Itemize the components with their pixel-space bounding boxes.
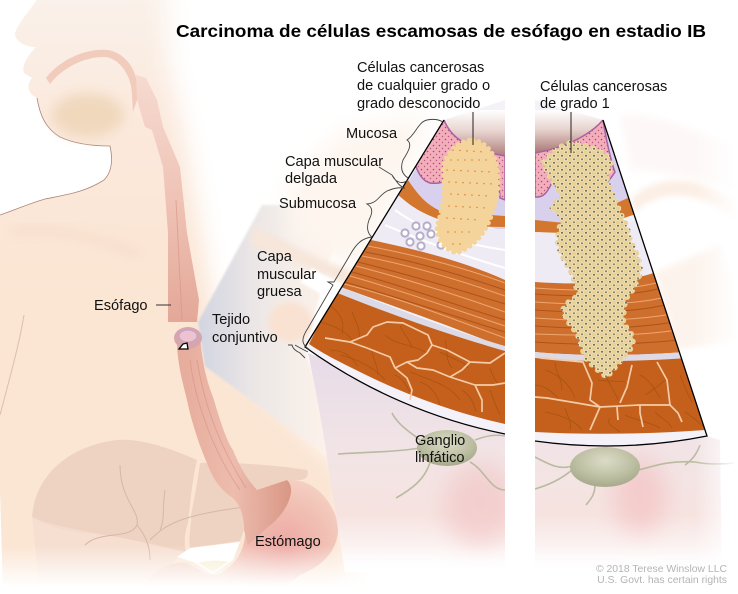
lumen [445,110,505,156]
label: ganglio linfático: Ganglio [415,433,465,449]
fade to right [695,90,738,570]
copyright: U.S. Govt. has certain rights [597,575,727,586]
pale tissue behind left sector [250,115,430,342]
connective tissue background left [308,353,505,572]
thin muscle [398,180,505,227]
label: estómago: Estómago [255,534,321,550]
lymph node left [338,413,505,498]
gap under liver [177,542,240,574]
layer brackets [288,119,443,358]
tumor [437,140,498,253]
lobe cracks [535,358,682,430]
thin muscle left [535,220,561,233]
label: capa muscular gruesa: muscular [257,267,316,283]
liver right lobe [189,463,308,548]
label: capa muscular delgada: delgada [285,171,338,187]
node body [570,447,640,487]
glands [401,222,445,250]
submucosa streaks [385,210,505,268]
body silhouette [0,0,350,579]
copyright: © 2018 Terese Winslow LLC [596,564,727,575]
muscle highlights [344,246,505,338]
label: capa muscular delgada: Capa muscular [285,154,383,170]
label: submucosa: Submucosa [279,196,357,212]
thick muscle ghost [655,245,738,350]
separating band [335,285,505,351]
thin muscle ghost [630,180,738,220]
submucosa [536,232,542,233]
lobed outer muscle [309,292,505,424]
label: tumor grade 1: de grado 1 [540,96,610,112]
cut ring [174,327,202,349]
sector base [535,100,715,445]
sector 1 [300,100,505,440]
fat under liver [198,561,228,572]
upper pale tissue [285,115,430,270]
separating band [535,352,688,361]
neck and shoulder outline [0,98,112,215]
stomach [140,480,338,594]
connective ghost [268,302,312,342]
label: tejido conjuntivo: conjuntivo [212,330,278,346]
thick longitudinal muscle [535,272,685,355]
muscle streaks [535,288,680,344]
muscle streaks [345,252,505,332]
callout line tumor 1 [472,112,474,145]
tumor speckles [446,150,494,244]
submucosa [398,196,505,232]
submucosa bracket [367,188,405,237]
liver vessels [85,465,245,560]
callout line tumor 2 [570,112,572,153]
lymph vessels [535,445,735,505]
muscle band ghost [250,225,352,285]
label: esófago: Esófago [94,298,148,314]
tissue red shading left [444,463,516,547]
lower segment [177,337,291,545]
fade to white at bottom [0,545,738,594]
thick muscle bracket [303,237,372,350]
sector 1 outline [305,120,505,434]
magnification wedge [198,205,345,470]
node body [417,430,477,466]
liver left lobe [32,440,197,552]
thick longitudinal muscle [335,240,505,348]
label: tumor any grade: Células cancerosas [357,60,484,76]
right pale tissue [620,114,738,350]
lobe fine cracks [535,362,705,432]
arm line [0,315,24,415]
mucosa ghost [620,114,738,190]
lumen [535,110,602,152]
white gap between panels [505,100,535,594]
mucosa bracket [402,119,443,178]
lymph node right [535,445,735,505]
tumor location marker [179,343,188,349]
collarbone shadow [10,230,140,255]
epithelium [415,120,505,200]
tissue red shading right [614,457,666,533]
thin muscle right [616,198,634,218]
lobe cracks [325,322,505,412]
jaw shadow [52,93,124,137]
head and torso [0,0,350,579]
label: mucosa: Mucosa [346,126,398,142]
esophagus [46,50,291,545]
mucosa lavender [535,129,628,222]
connective tissue bracket [288,345,308,358]
lobed outer muscle [535,358,705,434]
ring inner [179,330,197,342]
label: tejido conjuntivo: Tejido [212,312,250,328]
pharynx [46,50,137,112]
sector 2 [535,100,715,445]
muscle highlights [535,282,677,335]
lobe fine cracks [320,306,500,415]
arm edge [0,494,2,579]
callout line esófago [156,304,171,306]
white strip [300,268,345,302]
label: ganglio linfático: linfático [415,450,464,466]
connective tissue background right [535,436,722,572]
sector 2 outline [535,120,707,446]
upper segment [136,75,199,322]
lymph vessels [338,413,505,498]
epithelium [535,120,615,197]
sector base [300,100,505,440]
label: tumor any grade: de cualquier grado o [357,78,490,94]
label: capa muscular gruesa: Capa [257,249,293,265]
label: tumor any grade: grado desconocido [357,96,480,112]
label: capa muscular gruesa: gruesa [257,284,303,300]
thin muscle bracket [379,167,408,188]
title: Carcinoma de células escamosas de esófago en estadio IB [176,21,706,41]
label: tumor grade 1: Células cancerosas [540,79,667,95]
tumor [543,143,640,377]
lower abdomen shading [32,517,186,594]
mucosa lavender [408,168,505,229]
esophagus streaks [176,200,246,490]
